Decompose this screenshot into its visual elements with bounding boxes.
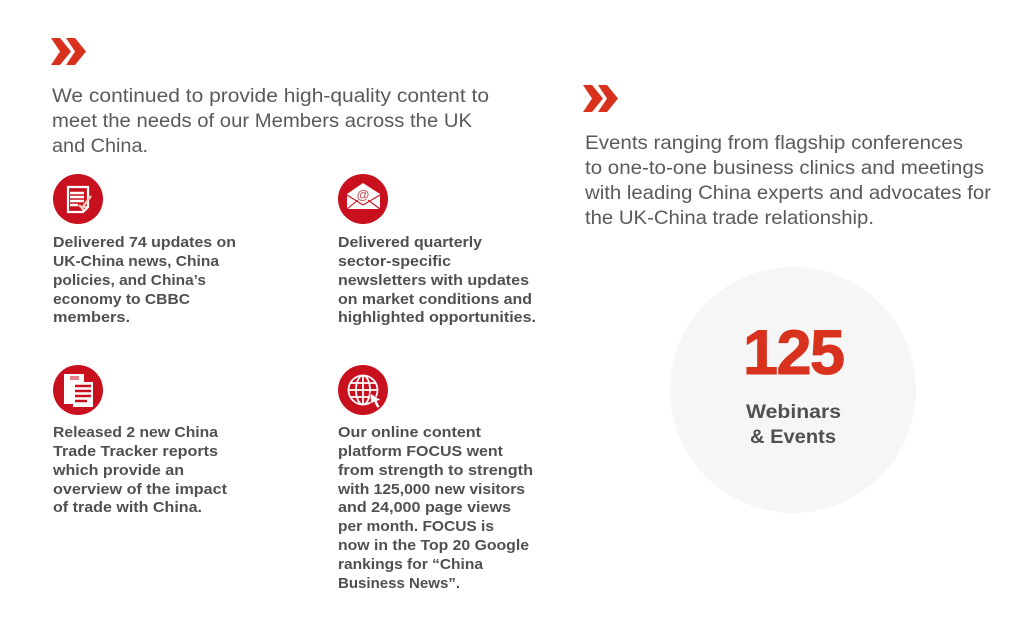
text: trade tracker: Trade Tracker reports — [53, 443, 218, 460]
icon: envelope — [338, 174, 388, 224]
text: trade tracker: Released 2 new China — [53, 424, 219, 441]
events text: to one-to-one business clinics and meetings — [585, 158, 984, 179]
text: trade tracker: of trade with China. — [53, 499, 202, 516]
panel: newsletters — [338, 174, 536, 326]
intro text: meet the needs of our Members across the UK — [52, 111, 472, 132]
text: updates: UK-China news, China — [53, 253, 220, 270]
text: FOCUS platform: Our online content — [338, 424, 481, 441]
text: FOCUS platform — [337, 424, 533, 592]
stat label: & Events — [750, 426, 836, 448]
text: FOCUS platform: rankings for “China — [338, 556, 484, 573]
text: updates: Delivered 74 updates on — [53, 234, 236, 251]
icon: globe — [338, 365, 388, 415]
panel: trade tracker — [52, 365, 227, 516]
text: updates: policies, and China’s — [53, 272, 206, 289]
icon: document — [53, 174, 103, 224]
text: FOCUS platform: Business News”. — [338, 575, 460, 592]
intro text — [52, 86, 489, 157]
stat circle: 125 webinars and events — [670, 267, 916, 513]
text: updates: economy to CBBC — [53, 291, 190, 308]
text: updates: members. — [53, 309, 130, 326]
text: trade tracker: which provide an — [52, 462, 184, 479]
icon: clipboard — [53, 365, 103, 415]
text: newsletters: sector-specific — [338, 253, 451, 270]
stat label — [746, 401, 841, 448]
text: newsletters: on market conditions and — [338, 291, 532, 308]
panel: FOCUS platform — [337, 365, 533, 592]
panel: updates — [53, 174, 236, 326]
events text: the UK-China trade relationship. — [585, 208, 874, 229]
events text: with leading China experts and advocates for — [584, 183, 992, 204]
events text: Events ranging from flagship conferences — [585, 133, 963, 154]
text: FOCUS platform: now in the Top 20 Google — [338, 537, 529, 554]
icon: left double chevron — [51, 38, 86, 65]
intro text: We continued to provide high-quality content to — [52, 86, 489, 107]
text: FOCUS platform: per month. FOCUS is — [338, 518, 494, 535]
intro text: and China. — [52, 136, 148, 157]
stat number: 125 — [743, 318, 845, 388]
text: FOCUS platform: with 125,000 new visitors — [337, 481, 525, 498]
text: updates — [53, 234, 236, 326]
text: newsletters: newsletters with updates — [338, 272, 529, 289]
stat label: Webinars — [746, 401, 841, 423]
text: FOCUS platform: platform FOCUS went — [338, 443, 503, 460]
events text — [584, 133, 992, 229]
text: newsletters — [338, 234, 536, 326]
text: FOCUS platform: and 24,000 page views — [338, 499, 511, 516]
text: newsletters: highlighted opportunities. — [338, 309, 536, 326]
icon: right double chevron — [583, 85, 618, 112]
text: trade tracker — [52, 424, 227, 516]
icon: envelope: @ — [357, 187, 369, 202]
text: FOCUS platform: from strength to strength — [338, 462, 533, 479]
text: trade tracker: overview of the impact — [53, 481, 227, 498]
text: newsletters: Delivered quarterly — [338, 234, 483, 251]
